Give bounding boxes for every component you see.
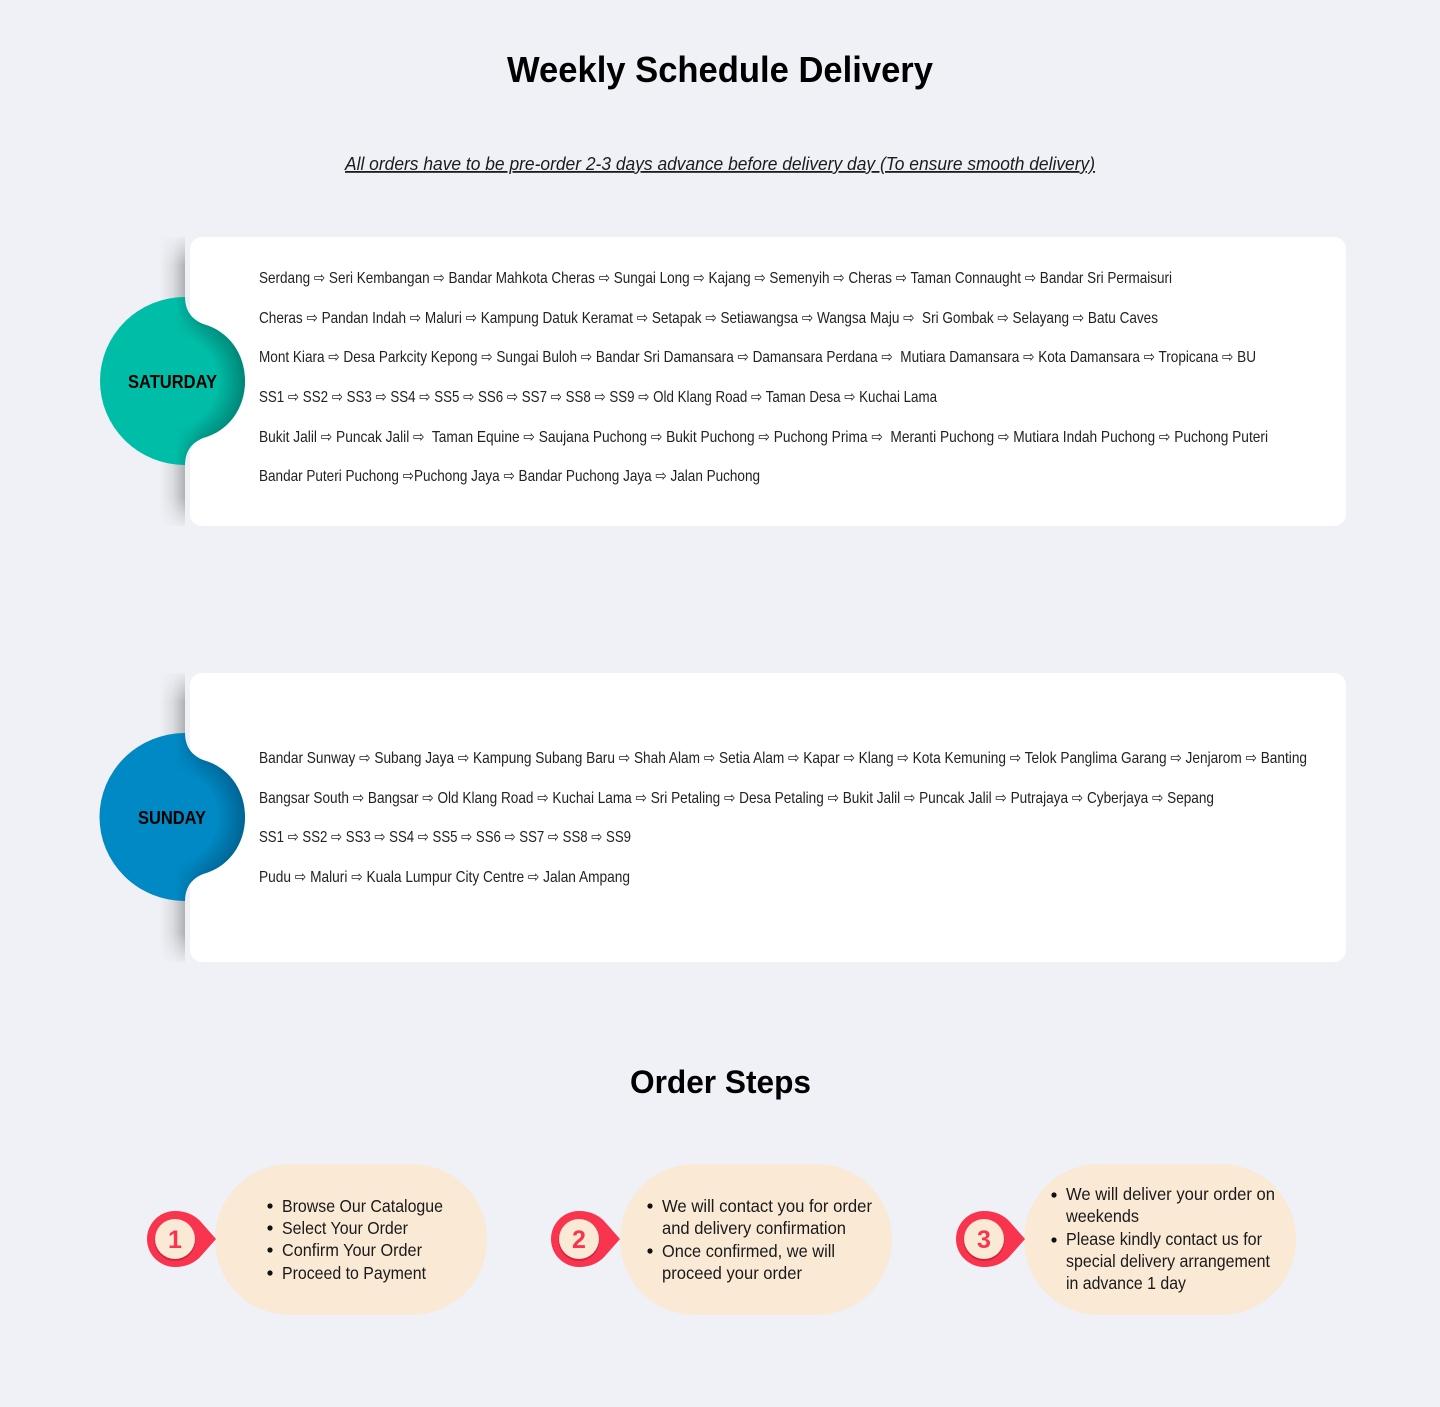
sunday label: SUNDAY — [138, 808, 206, 828]
saturday routes: SS1 ⇨ SS2 ⇨ SS3 ⇨ SS4 ⇨ SS5 ⇨ SS6 ⇨ SS7 ⇨ SS8 ⇨ SS9 ⇨ Old Klang Road ⇨ Taman Desa ⇨ Kuchai Lama — [259, 389, 937, 406]
step 3 text — [1051, 1184, 1275, 1293]
sunday routes: Pudu ⇨ Maluri ⇨ Kuala Lumpur City Centre ⇨ Jalan Ampang — [259, 869, 630, 886]
step 2 — [551, 1164, 892, 1315]
step 1 marker: 1 — [168, 1226, 182, 1254]
panel: saturday — [100, 237, 1346, 526]
step 3 — [956, 1164, 1296, 1315]
step 1 text: Browse Our Catalogue — [282, 1196, 443, 1216]
panel shadow — [164, 238, 185, 526]
step 2 text: and delivery confirmation — [662, 1218, 846, 1238]
step 2 marker: 2 — [572, 1226, 586, 1254]
step 2 text: We will contact you for order — [662, 1196, 872, 1216]
saturday routes: Bandar Puteri Puchong ⇨Puchong Jaya ⇨ Bandar Puchong Jaya ⇨ Jalan Puchong — [259, 468, 760, 485]
heading: order steps: Order Steps — [630, 1064, 811, 1100]
step 3 text: weekends — [1065, 1206, 1139, 1226]
saturday badge — [100, 297, 245, 465]
step 2 pill — [620, 1164, 892, 1315]
step 2 marker — [551, 1211, 620, 1267]
step 1 pill — [215, 1164, 487, 1315]
step 3 pill — [1024, 1164, 1296, 1315]
saturday routes: Mont Kiara ⇨ Desa Parkcity Kepong ⇨ Sungai Buloh ⇨ Bandar Sri Damansara ⇨ Damansara Perdana ⇨ Mutiara Damansara ⇨ Kota Damansara ⇨ Tropicana ⇨ BU — [259, 349, 1256, 366]
step 3 text: in advance 1 day — [1066, 1273, 1186, 1293]
step 1 text: Select Your Order — [282, 1218, 408, 1238]
step 2 text: Once confirmed, we will — [662, 1241, 835, 1261]
step 2 text: proceed your order — [662, 1263, 802, 1283]
title: Weekly Schedule Delivery — [507, 49, 933, 90]
sunday routes: Bangsar South ⇨ Bangsar ⇨ Old Klang Road ⇨ Kuchai Lama ⇨ Sri Petaling ⇨ Desa Petaling ⇨ Bukit Jalil ⇨ Puncak Jalil ⇨ Putrajaya ⇨ Cyberjaya ⇨ Sepang — [259, 790, 1214, 807]
saturday card — [190, 237, 1346, 526]
sunday routes: SS1 ⇨ SS2 ⇨ SS3 ⇨ SS4 ⇨ SS5 ⇨ SS6 ⇨ SS7 ⇨ SS8 ⇨ SS9 — [259, 829, 631, 846]
step 3 text: We will deliver your order on — [1066, 1184, 1275, 1204]
step 3 marker: 3 — [977, 1226, 991, 1254]
sunday badge — [100, 733, 245, 901]
saturday routes: Cheras ⇨ Pandan Indah ⇨ Maluri ⇨ Kampung Datuk Keramat ⇨ Setapak ⇨ Setiawangsa ⇨ Wangsa Maju ⇨ Sri Gombak ⇨ Selayang ⇨ Batu Caves — [259, 310, 1158, 327]
saturday routes: Serdang ⇨ Seri Kembangan ⇨ Bandar Mahkota Cheras ⇨ Sungai Long ⇨ Kajang ⇨ Semenyih ⇨ Cheras ⇨ Taman Connaught ⇨ Bandar Sri Permaisuri — [259, 270, 1172, 287]
saturday routes — [259, 270, 1268, 485]
step 1 text — [267, 1196, 443, 1283]
sunday routes — [259, 750, 1307, 886]
panel shadow — [164, 674, 185, 962]
panel: sunday — [100, 673, 1346, 962]
step 3 text: Please kindly contact us for — [1066, 1229, 1262, 1249]
saturday routes: Bukit Jalil ⇨ Puncak Jalil ⇨ Taman Equine ⇨ Saujana Puchong ⇨ Bukit Puchong ⇨ Puchong Prima ⇨ Meranti Puchong ⇨ Mutiara Indah Puchong ⇨ Puchong Puteri — [259, 429, 1268, 446]
step 1 text: Confirm Your Order — [282, 1240, 422, 1260]
saturday label: SATURDAY — [128, 372, 217, 392]
step 2 text — [647, 1196, 872, 1283]
step 3 text: special delivery arrangement — [1066, 1251, 1270, 1271]
step 1 marker — [147, 1211, 216, 1267]
sunday card — [190, 673, 1346, 962]
subtitle: pre-order notice: All orders have to be pre-order 2-3 days advance before delivery day (To ensure smooth delivery) — [344, 154, 1095, 174]
step 1 text: Proceed to Payment — [282, 1263, 426, 1283]
step 1 — [147, 1164, 487, 1315]
step 3 marker — [956, 1211, 1025, 1267]
